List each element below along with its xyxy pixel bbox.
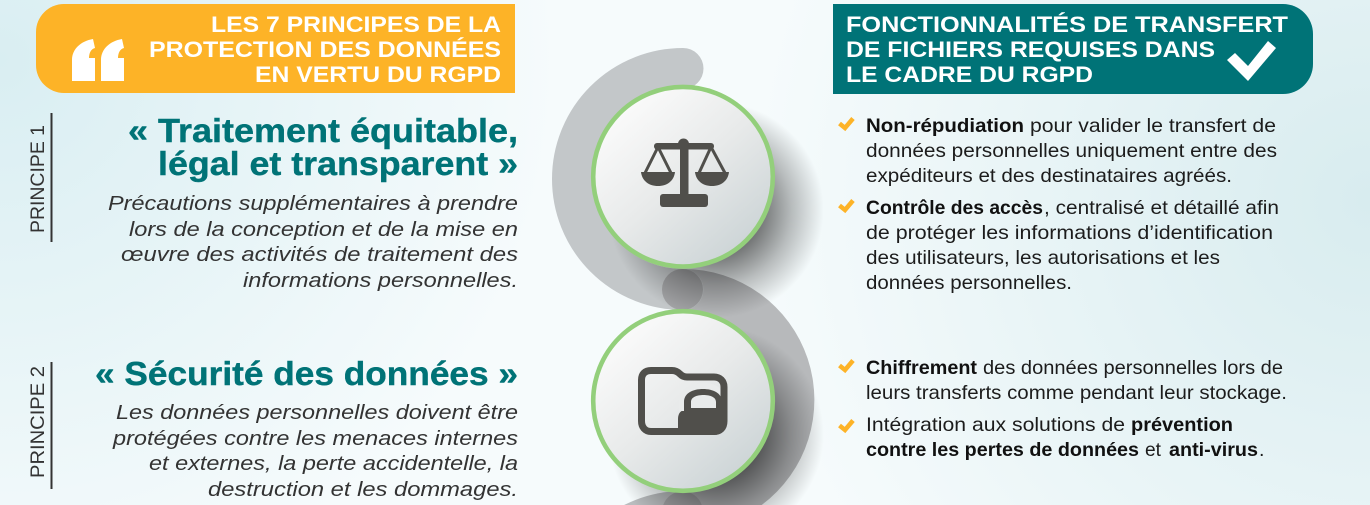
text: encryption bbox=[866, 357, 1287, 404]
title: principe 2: « Sécurité des données » bbox=[95, 355, 518, 392]
heading: right header: DE FICHIERS REQUISES DANS bbox=[846, 37, 1215, 62]
ribbon: third arc bbox=[624, 491, 683, 505]
heading: right header: LE CADRE DU RGPD bbox=[846, 62, 1093, 87]
ribbon: left arc bbox=[573, 68, 683, 290]
description: principe 1: lors de la conception et de la mise en bbox=[129, 219, 518, 241]
shadow: circle 2 bbox=[608, 326, 824, 505]
heading: left header bbox=[149, 12, 501, 87]
text: integration: anti-virus bbox=[1169, 439, 1258, 461]
text: non-repudiation: Non-répudiation bbox=[866, 115, 1024, 137]
icon: orange tick bbox=[840, 200, 853, 210]
heading: left header: EN VERTU DU RGPD bbox=[255, 62, 501, 87]
label: principe 1: PRINCIPE 1 bbox=[27, 125, 49, 233]
circle: principe 1 bbox=[593, 87, 773, 266]
heading: left header: LES 7 PRINCIPES DE LA bbox=[211, 12, 501, 37]
heading: right header bbox=[846, 12, 1289, 87]
description: principe 1: Précautions supplémentaires à prendre bbox=[108, 193, 518, 215]
description: principe 2: protégées contre les menaces internes bbox=[112, 428, 518, 450]
panel: 7 principles header bbox=[36, 4, 515, 93]
text: access control bbox=[866, 197, 1279, 294]
diagram: winding ribbon with circles bbox=[573, 68, 824, 505]
icon: quotation mark bbox=[72, 39, 124, 81]
text: non-repudiation bbox=[866, 115, 1277, 187]
text: access control: données personnelles. bbox=[866, 272, 1072, 294]
icon: balance scale bbox=[641, 138, 729, 207]
text: integration bbox=[866, 414, 1264, 461]
text block: principe 2 bbox=[95, 355, 518, 501]
list: features group 2 bbox=[840, 357, 1287, 461]
text block: principe 1 bbox=[108, 112, 518, 292]
label: principe 2: PRINCIPE 2 bbox=[27, 366, 49, 478]
title: principe 1: « Traitement équitable, bbox=[128, 112, 518, 149]
panel: file transfer features header bbox=[833, 4, 1313, 94]
description: principe 2: et externes, la perte accidentelle, la bbox=[149, 453, 518, 475]
title: principe 1: légal et transparent » bbox=[158, 145, 518, 182]
icon: locked folder bbox=[642, 370, 727, 435]
text: encryption: des données personnelles lors de bbox=[983, 357, 1283, 379]
text: encryption: Chiffrement bbox=[866, 357, 978, 379]
description: principe 1: informations personnelles. bbox=[243, 270, 518, 292]
text: non-repudiation: expéditeurs et des destinataires agréés. bbox=[866, 165, 1232, 187]
circle: principe 2 bbox=[593, 311, 773, 491]
text: access control: , centralisé et détaillé afin bbox=[1044, 197, 1279, 219]
icon: orange tick bbox=[840, 118, 853, 128]
icon: check mark bbox=[1227, 41, 1276, 81]
text: integration: . bbox=[1259, 439, 1264, 461]
text: non-repudiation: données personnelles uniquement entre des bbox=[866, 140, 1277, 162]
text: access control: des utilisateurs, les autorisations et les bbox=[866, 247, 1220, 269]
text: access control: Contrôle des accès bbox=[866, 197, 1043, 219]
description: principe 2: Les données personnelles doivent être bbox=[116, 402, 518, 424]
text: access control: de protéger les informations d’identification bbox=[866, 222, 1273, 244]
description: principe 1 bbox=[108, 193, 518, 292]
shadow: circle 1 bbox=[608, 102, 824, 318]
title: principe 1 bbox=[128, 112, 518, 182]
text: integration: contre les pertes de données bbox=[866, 439, 1139, 461]
description: principe 2: destruction et les dommages. bbox=[208, 479, 518, 501]
text: encryption: leurs transferts comme pendant leur stockage. bbox=[866, 382, 1287, 404]
list: features group 1 bbox=[840, 115, 1279, 294]
description: principe 1: œuvre des activités de traitement des bbox=[121, 244, 518, 266]
icon: orange tick bbox=[840, 360, 853, 370]
ribbon: right arc bbox=[683, 269, 814, 505]
text: integration: Intégration aux solutions de bbox=[866, 414, 1125, 436]
ribbon: junction dots bbox=[662, 269, 703, 505]
text: non-repudiation: pour valider le transfert de bbox=[1030, 115, 1276, 137]
heading: right header: FONCTIONNALITÉS DE TRANSFERT bbox=[846, 12, 1289, 37]
icon: orange tick bbox=[840, 420, 853, 430]
text: integration: et bbox=[1145, 439, 1162, 461]
heading: left header: PROTECTION DES DONNÉES bbox=[149, 37, 501, 62]
text: integration: prévention bbox=[1131, 414, 1233, 436]
description: principe 2 bbox=[112, 402, 518, 501]
